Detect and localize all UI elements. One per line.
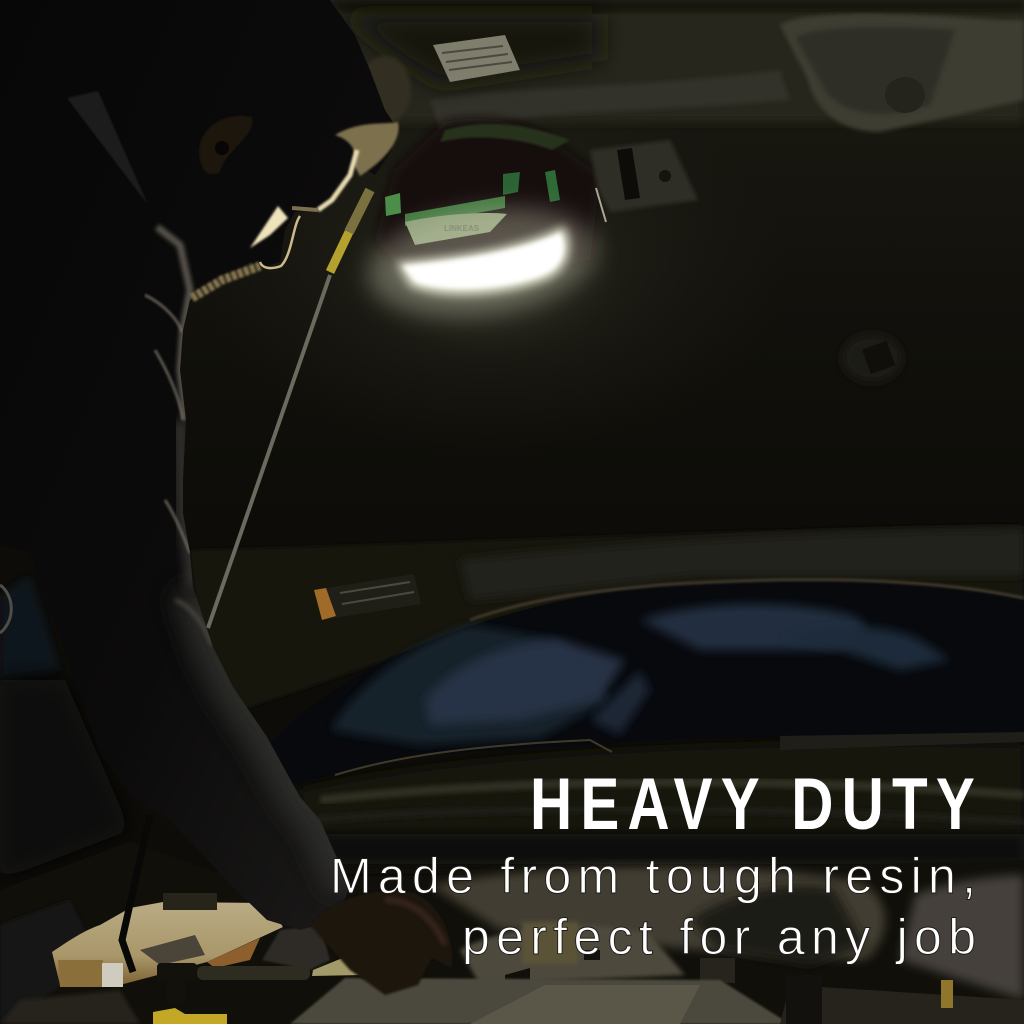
icon: work light xyxy=(361,119,603,329)
yellow inspection rod xyxy=(208,190,370,628)
icon: hand on engine xyxy=(310,891,452,995)
icon: sticker on hood xyxy=(433,35,520,82)
text block: subtitle: perfect for any job xyxy=(462,909,976,965)
panel: engine bay xyxy=(0,842,1024,1024)
left background glimpse xyxy=(0,575,130,880)
icon: coolant reservoir xyxy=(52,815,310,1024)
panel: cowl and windshield xyxy=(190,525,1024,785)
icon: hood latch bracket xyxy=(590,140,698,222)
title: HEAVY DUTY xyxy=(530,764,975,846)
figure: mechanic silhouette xyxy=(0,0,400,940)
panel: wipers and cowl panel xyxy=(300,732,1024,870)
text block: subtitle xyxy=(330,848,976,965)
text block: subtitle: Made from tough resin, xyxy=(330,848,976,904)
icon: work light: LINKEAS xyxy=(444,224,480,233)
